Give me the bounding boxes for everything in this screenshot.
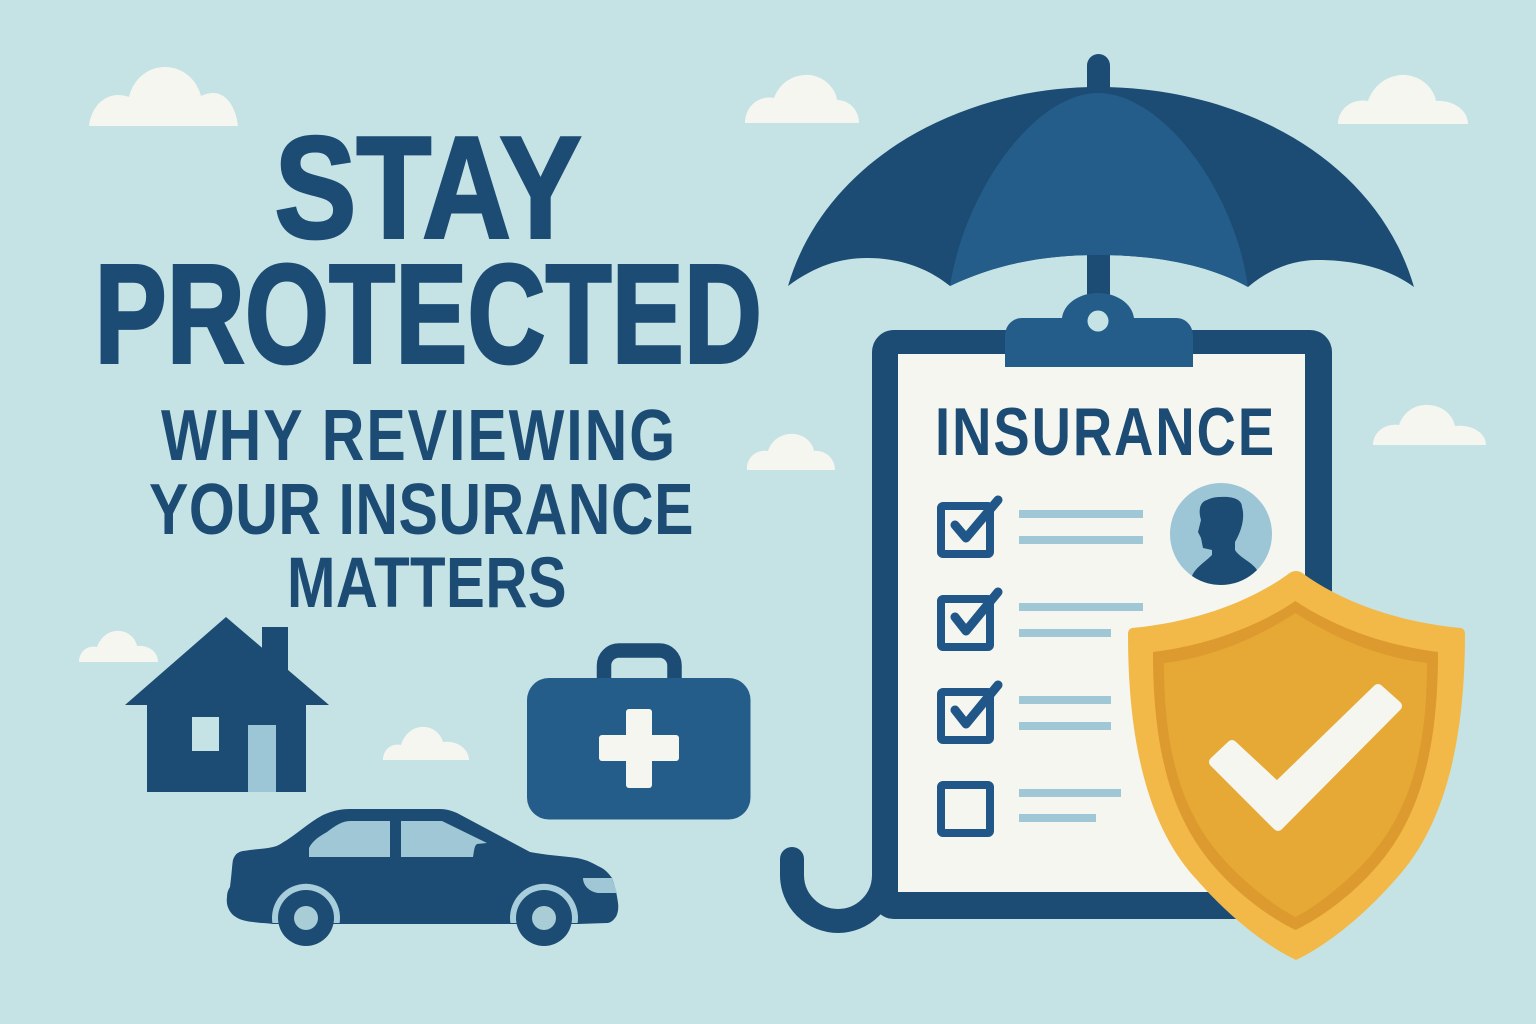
- subtitle: [149, 394, 693, 622]
- clipboard clip: [1005, 293, 1193, 367]
- cloud: left of house: [79, 631, 158, 662]
- cloud: top centre: [745, 75, 859, 123]
- clipboard: [872, 293, 1332, 919]
- icon: medical kit: [527, 650, 750, 820]
- portrait avatar: [1170, 483, 1272, 585]
- umbrella pole and handle: [792, 54, 1110, 921]
- checklist item 3: [941, 685, 1111, 740]
- title: Stay Protected: STAY: [274, 106, 582, 268]
- cloud: centre middle: [747, 434, 835, 470]
- subtitle: WHY REVIEWING: [161, 394, 675, 475]
- icon: car: [227, 809, 618, 946]
- cloud: right middle: [1373, 405, 1486, 445]
- title: Stay Protected: PROTECTED: [94, 234, 762, 392]
- checklist item 1: [941, 500, 1143, 554]
- subtitle: MATTERS: [287, 542, 567, 622]
- clipboard heading: INSURANCE: [935, 394, 1274, 470]
- shield with check: [1128, 571, 1465, 960]
- subtitle: YOUR INSURANCE: [149, 468, 693, 549]
- checklist item 4: [941, 785, 1121, 833]
- checklist item 2: [941, 592, 1143, 647]
- cloud: top right: [1338, 75, 1468, 124]
- umbrella canopy: [788, 87, 1414, 287]
- cloud: between house and kit: [383, 727, 469, 760]
- title: Stay Protected: [94, 106, 762, 392]
- icon: house: [125, 617, 329, 792]
- cloud: top left: [89, 67, 238, 126]
